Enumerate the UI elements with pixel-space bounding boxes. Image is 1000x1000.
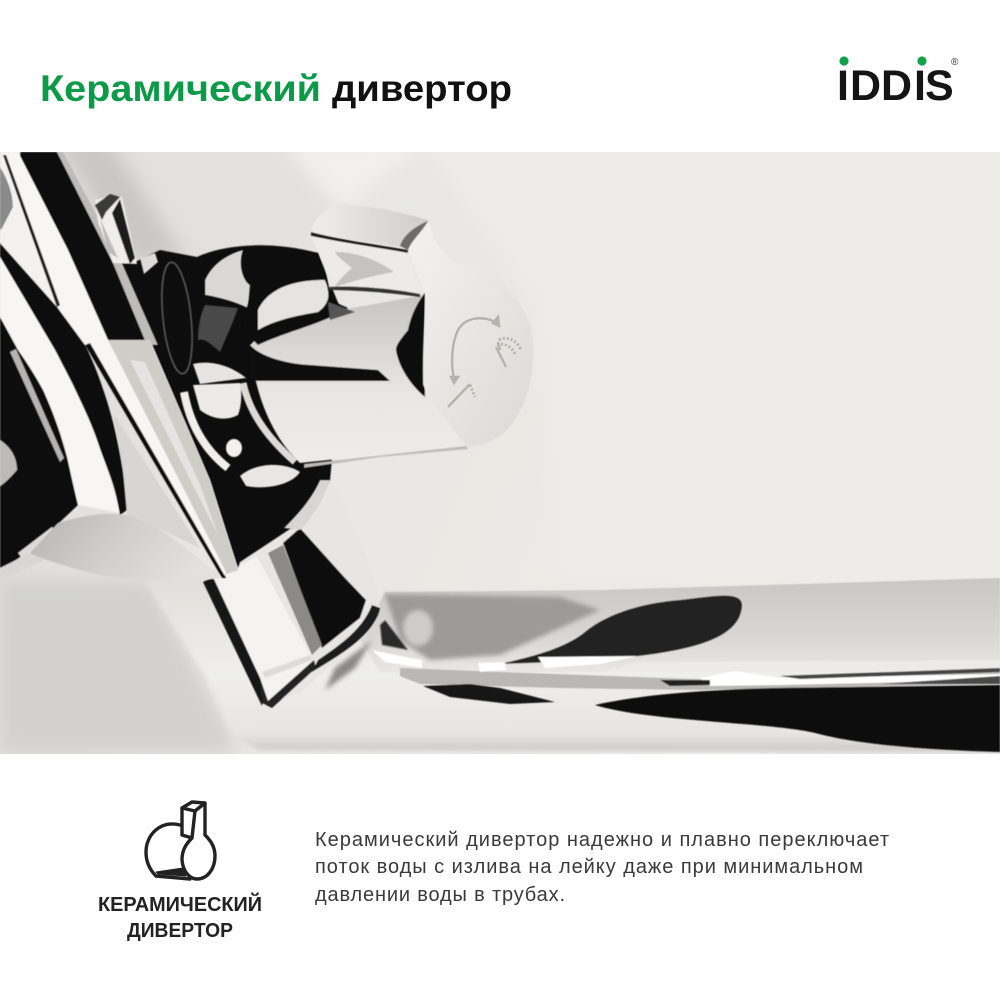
white band bbox=[0, 257, 119, 513]
black diagonal band bbox=[0, 243, 127, 515]
title: Керамический bbox=[40, 68, 321, 109]
description text: поток воды с излива на лейку даже при минимальном bbox=[315, 856, 863, 878]
icon label: КЕРАМИЧЕСКИЙ bbox=[98, 892, 262, 916]
grey oval corner bbox=[0, 152, 20, 252]
knob handle cap bbox=[311, 204, 533, 447]
lower black reflection on spout bbox=[595, 685, 1000, 752]
knob top facet bbox=[311, 204, 429, 248]
faucet main body bbox=[0, 152, 238, 581]
spout seam band bbox=[400, 668, 1000, 690]
icon label: ДИВЕРТОР bbox=[127, 920, 233, 942]
logo: IDDIS: ® bbox=[951, 57, 959, 68]
spout lower body bbox=[188, 643, 998, 754]
wall shading bbox=[0, 152, 387, 754]
white chrome strip bbox=[3, 152, 226, 578]
knob engraved arrow and shower symbols bbox=[448, 317, 521, 407]
ring at base of neck bbox=[312, 605, 380, 672]
dark reflection on cylinder bbox=[396, 293, 425, 397]
faucet base and neck bbox=[202, 528, 381, 709]
spout upper chrome bbox=[360, 578, 1000, 752]
description text: Керамический дивертор надежно и плавно переключает bbox=[315, 829, 889, 851]
neck grey streak bbox=[268, 545, 322, 655]
photo: chrome faucet diverter bbox=[0, 140, 1000, 754]
logo: IDDIS: IDDIS bbox=[837, 62, 954, 110]
grey-white stripes right of strip bbox=[108, 340, 238, 574]
lower black mass bbox=[0, 317, 78, 570]
nut black mass behind body bbox=[113, 245, 345, 568]
description text: давлении воды в трубах. bbox=[315, 884, 565, 906]
icon: ceramic diverter bbox=[146, 802, 215, 879]
icon label bbox=[98, 892, 262, 942]
knob cylinder bbox=[243, 253, 468, 468]
white panel left of line bbox=[2, 201, 58, 307]
grey triangular area bbox=[113, 413, 200, 548]
body black top band bbox=[18, 152, 147, 345]
description text bbox=[315, 829, 889, 906]
title: дивертор bbox=[332, 68, 512, 109]
lobe bbox=[30, 514, 222, 581]
nut ring bbox=[160, 261, 194, 375]
white prism bbox=[213, 557, 313, 703]
dark reflection on spout bbox=[500, 596, 742, 664]
knob lower facet bbox=[311, 236, 420, 294]
title bbox=[40, 68, 512, 109]
grey streak beside band bbox=[57, 152, 158, 345]
bracket at top of body bbox=[95, 194, 197, 375]
knob collar reflections bbox=[184, 250, 330, 530]
